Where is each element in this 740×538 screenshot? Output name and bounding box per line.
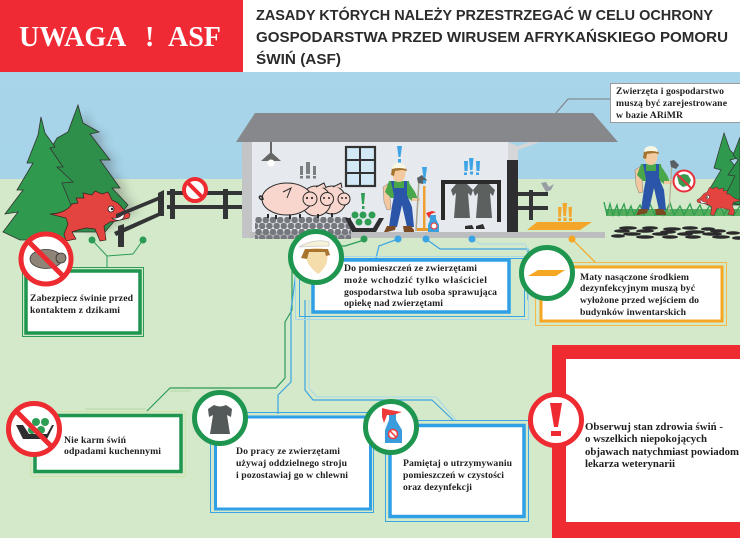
panel: disinfectant mats: dezynfekcyjnym muszą być <box>580 283 696 294</box>
right post <box>507 160 518 232</box>
roof <box>236 113 618 142</box>
spray bottle <box>426 211 439 232</box>
wild boar at fence <box>50 191 130 241</box>
panel: registration note <box>610 84 740 122</box>
background: meadow <box>0 179 740 538</box>
panel: observe pig health: objawach natychmiast powiadom <box>585 446 739 458</box>
banner title: UWAGA <box>19 22 127 53</box>
panel: registration note: Zwierzęta i gospodarstwo <box>616 86 724 97</box>
right scene: wild boar <box>697 187 740 215</box>
panel: disinfectant mats: budynków inwentarskich <box>580 307 687 318</box>
icon: red exclamation mark <box>530 394 582 446</box>
right scene: black stones <box>611 226 740 240</box>
heading <box>256 6 728 68</box>
barn <box>236 113 618 238</box>
panel: cleanliness and disinfection: oraz dezynfekcji <box>403 482 472 493</box>
panel: separate work clothes <box>210 412 374 512</box>
icon: apron <box>194 392 246 444</box>
panel: cleanliness and disinfection: Pamiętaj o utrzymywaniu <box>403 458 513 469</box>
disinfectant mat <box>527 203 592 230</box>
feed trough <box>345 193 384 232</box>
banner title: ! <box>145 22 154 53</box>
panel: separate work clothes: Do pracy ze zwierzętami <box>236 446 340 457</box>
icon: crossed out trough <box>8 404 60 454</box>
panel: cleanliness and disinfection: pomieszczeń w czystości <box>403 470 504 481</box>
panel: access to animal rooms: opiekę nad zwierzętami <box>344 298 443 309</box>
panel: cleanliness and disinfection <box>386 420 528 522</box>
lamp <box>261 142 281 166</box>
panel: observe pig health: lekarza weterynarii <box>585 458 675 470</box>
floor strip <box>250 232 605 238</box>
panel: protect pigs from wild boars: Zabezpiecz świnie przed <box>30 293 134 304</box>
panel: protect pigs from wild boars: kontaktem z dzikami <box>30 305 120 316</box>
pigs <box>259 183 350 219</box>
heading: ZASADY KTÓRYCH NALEŻY PRZESTRZEGAĆ W CELU OCHRONY <box>256 6 713 24</box>
heading: ŚWIŃ (ASF) <box>256 50 341 68</box>
farmer in barn <box>383 163 420 232</box>
header panel <box>0 0 740 72</box>
icon: disinfectant mat <box>522 248 572 298</box>
right scene: farmer <box>635 146 672 215</box>
icon: crossed out pig <box>21 234 71 284</box>
barn wall <box>242 142 508 238</box>
exclamation over farmer <box>397 146 402 162</box>
banner title: ASF <box>168 22 221 53</box>
exclamation marks over pigs <box>300 162 316 178</box>
fence with broken section <box>114 189 242 247</box>
heading: GOSPODARSTWA PRZED WIRUSEM AFRYKAŃSKIEGO POMORU <box>256 29 728 46</box>
icon: farmer face <box>290 232 342 282</box>
clothes rack with aprons <box>441 158 501 229</box>
panel: observe pig health: o wszelkich niepokojących <box>585 433 707 445</box>
panel: disinfectant mats <box>536 262 726 326</box>
roof support <box>508 142 540 160</box>
panel: no kitchen waste <box>30 412 186 476</box>
icon: no entry sign on fence <box>184 179 206 201</box>
panel: observe pig health: Obserwuj stan zdrowia świń - <box>585 421 723 433</box>
panel: registration note: w bazie ARiMR <box>616 110 684 121</box>
right scene: trees <box>707 133 740 205</box>
green exclamation mark <box>361 193 365 209</box>
panel: disinfectant mats: wyłożone przed wejściem do <box>580 295 699 306</box>
panel: disinfectant mats: Maty nasączone środkiem <box>580 272 689 283</box>
panel: protect pigs from wild boars <box>22 268 144 336</box>
barn left column <box>242 142 252 238</box>
panel: no kitchen waste: odpadami kuchennymi <box>64 446 161 457</box>
panel: access to animal rooms <box>296 256 528 320</box>
stone floor <box>255 217 351 239</box>
icon: spray bottle <box>366 402 416 452</box>
right scene: grass <box>604 202 740 216</box>
connector dots <box>88 236 576 244</box>
panel: observe pig health <box>552 345 740 538</box>
background: sky <box>0 72 740 180</box>
panel: no kitchen waste: Nie karm świń <box>64 435 127 446</box>
right fence and bird <box>518 182 554 220</box>
left trees <box>3 105 138 240</box>
red banner <box>0 0 243 72</box>
panel: registration note: muszą być zarejestrowane <box>616 98 728 109</box>
connector lines <box>85 99 610 420</box>
panel: access to animal rooms: gospodarstwa lub osoba sprawująca <box>344 287 497 298</box>
panel: access to animal rooms: Do pomieszczeń ze zwierzętami <box>344 263 477 274</box>
panel: access to animal rooms: może wchodzić tylko właściciel <box>344 275 487 286</box>
window <box>346 147 375 186</box>
panel: separate work clothes: i pozostawiaj go w chlewni <box>236 470 348 481</box>
right scene: tool and prohibited sign <box>669 160 694 212</box>
shovel and broom <box>416 167 432 231</box>
panel: separate work clothes: używaj oddzielnego stroju <box>236 458 348 469</box>
